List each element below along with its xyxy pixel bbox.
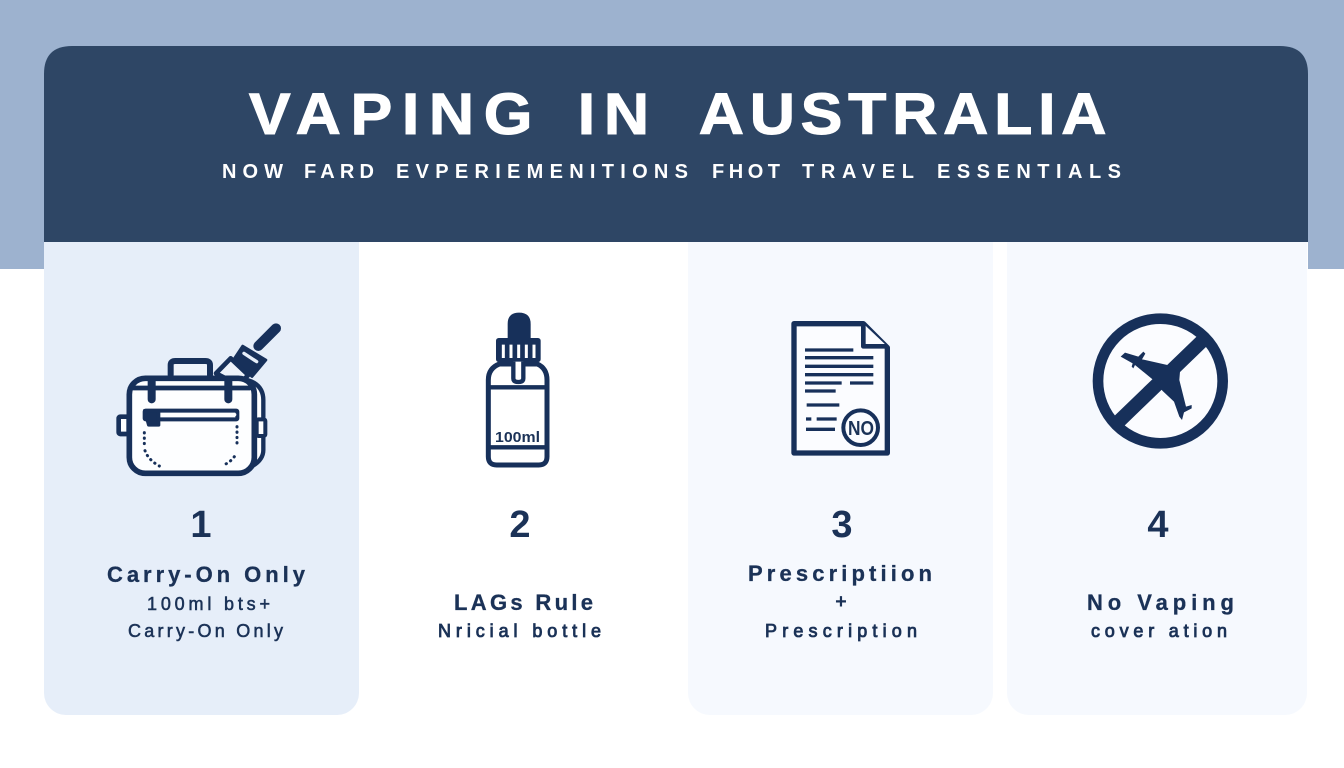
- title: [249, 81, 1106, 146]
- icon: no flying symbol: [1098, 319, 1223, 443]
- panel: header banner: [44, 46, 1308, 242]
- title: IN: [578, 81, 649, 146]
- heading: carry-on only: Carry-On Only: [107, 562, 306, 587]
- number 3: 3: [831, 504, 853, 546]
- text: 100ml bts+: 100ml bts+: [147, 594, 270, 614]
- number 2: 2: [509, 504, 531, 546]
- subtitle: [222, 161, 1121, 183]
- subtitle: FARD: [304, 161, 374, 183]
- subtitle: ESSENTIALS: [937, 161, 1121, 183]
- title: VAPING: [249, 81, 532, 146]
- heading: LAGs rule: LAGs Rule: [454, 590, 593, 615]
- text: cover ation: cover ation: [1091, 621, 1227, 641]
- panel: card 1 carry-on only: [44, 200, 359, 715]
- text: nricial bottle: Nricial bottle: [438, 621, 601, 641]
- panel: card 4 no vaping: [1007, 200, 1307, 715]
- panel: card 2 LAGs rule: [438, 313, 601, 641]
- text: carry-on only: Carry-On Only: [128, 621, 283, 641]
- text: prescription: Prescription: [765, 621, 917, 641]
- subtitle: TRAVEL: [802, 161, 914, 183]
- icon: 100ml dropper bottle: [488, 313, 547, 465]
- subtitle: NOW: [222, 161, 283, 183]
- icon: carry-on bag with bottle: [119, 328, 276, 473]
- stamp text: NO: [848, 418, 874, 440]
- subtitle: EVPERIEMENITIONS: [396, 161, 688, 183]
- heading: prescriptiion: Prescriptiion: [748, 561, 932, 586]
- title: AUSTRALIA: [699, 81, 1106, 146]
- heading: no vaping: No Vaping: [1087, 590, 1234, 615]
- number 4: 4: [1147, 504, 1169, 546]
- icon: prescription document with NO stamp: [794, 324, 887, 453]
- panel: card 3 prescription: [688, 200, 993, 715]
- plus sign: +: [835, 591, 847, 613]
- bottle label: 100ml: [495, 429, 540, 446]
- subtitle: FHOT: [712, 161, 780, 183]
- number 1: 1: [190, 504, 212, 546]
